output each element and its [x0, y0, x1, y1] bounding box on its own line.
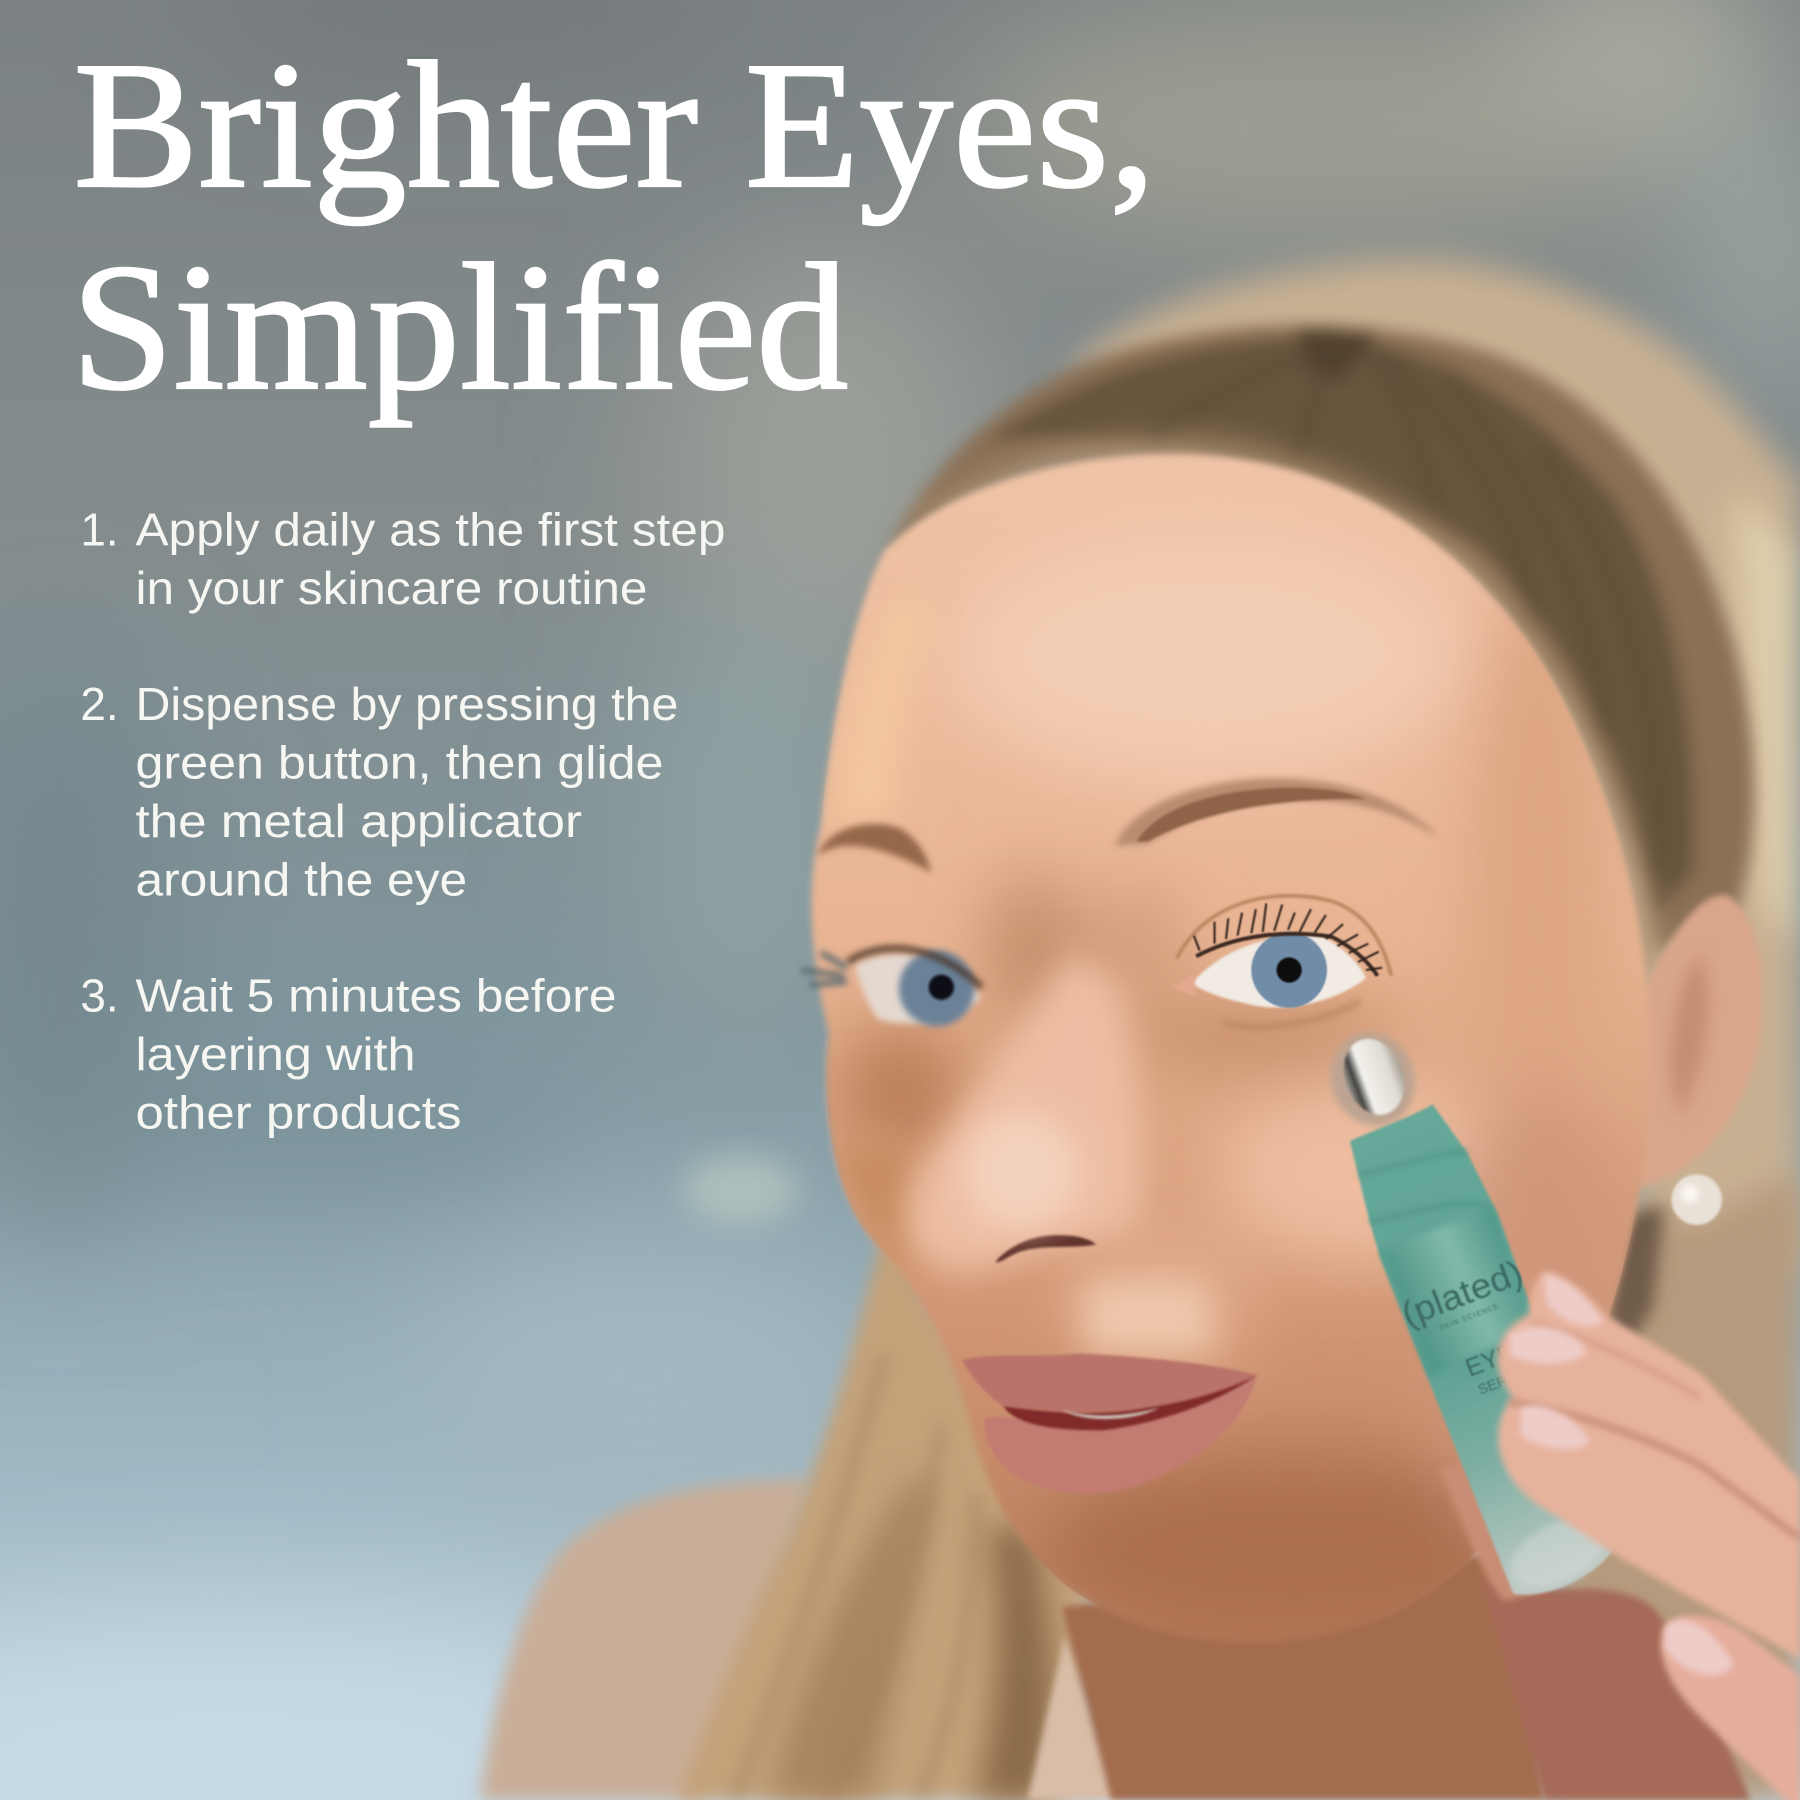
step 2: Dispense by pressing the [135, 678, 678, 730]
title: Simplified [71, 227, 848, 428]
step 1: in your skincare routine [135, 562, 647, 614]
bottle label text [1396, 1252, 1559, 1414]
step 2: green button, then glide [135, 736, 664, 788]
step 2: around the eye [135, 853, 467, 905]
step 2: 2. [80, 678, 119, 730]
face [812, 454, 1649, 1642]
product: green serum bottle [1350, 1104, 1618, 1601]
bottle label text: SKIN SCIENCE [1439, 1303, 1500, 1332]
hair: blond strands falling on the left [677, 1228, 1091, 1800]
nose [909, 953, 1213, 1350]
applicator: metal ball and halo reflection [1319, 1022, 1427, 1137]
left eye [801, 948, 982, 1026]
step 2 [80, 678, 678, 905]
right eye [1171, 896, 1391, 1027]
hand: palm behind the bottle [1441, 1458, 1751, 1800]
hair: dark brown pulled-back hair [884, 325, 1754, 976]
step 3: other products [135, 1086, 461, 1138]
step 2: the metal applicator [135, 795, 582, 847]
lips [962, 1353, 1257, 1494]
fingernails [1510, 1274, 1733, 1675]
neck [1062, 1550, 1544, 1800]
title [71, 25, 1156, 428]
title: Brighter Eyes, [73, 25, 1156, 226]
step 3: 3. [80, 969, 119, 1021]
shoulder: beige top [480, 1479, 809, 1800]
step 1 [80, 503, 726, 614]
step 1: Apply daily as the first step [135, 503, 726, 555]
left eyebrow [817, 824, 931, 872]
bottle label text: EYE [1462, 1338, 1519, 1383]
beige top: collar sliver beside neck [1027, 1636, 1119, 1800]
bottle label text: SERUM [1476, 1364, 1532, 1399]
ear [1636, 895, 1763, 1188]
step 1: 1. [80, 503, 119, 555]
step 3: Wait 5 minutes before [135, 969, 616, 1021]
bottle label text: (plated) [1396, 1252, 1528, 1335]
step 3: layering with [135, 1028, 416, 1080]
hair: blond outer halo and ponytail [1062, 260, 1800, 1274]
hair: blond strands falling behind jaw on the right [1538, 1171, 1800, 1800]
right eyebrow [1115, 778, 1441, 846]
pearl earring [1671, 1174, 1722, 1225]
step 3 [80, 969, 616, 1138]
hand: fingers in front of the bottle [1497, 1272, 1800, 1800]
